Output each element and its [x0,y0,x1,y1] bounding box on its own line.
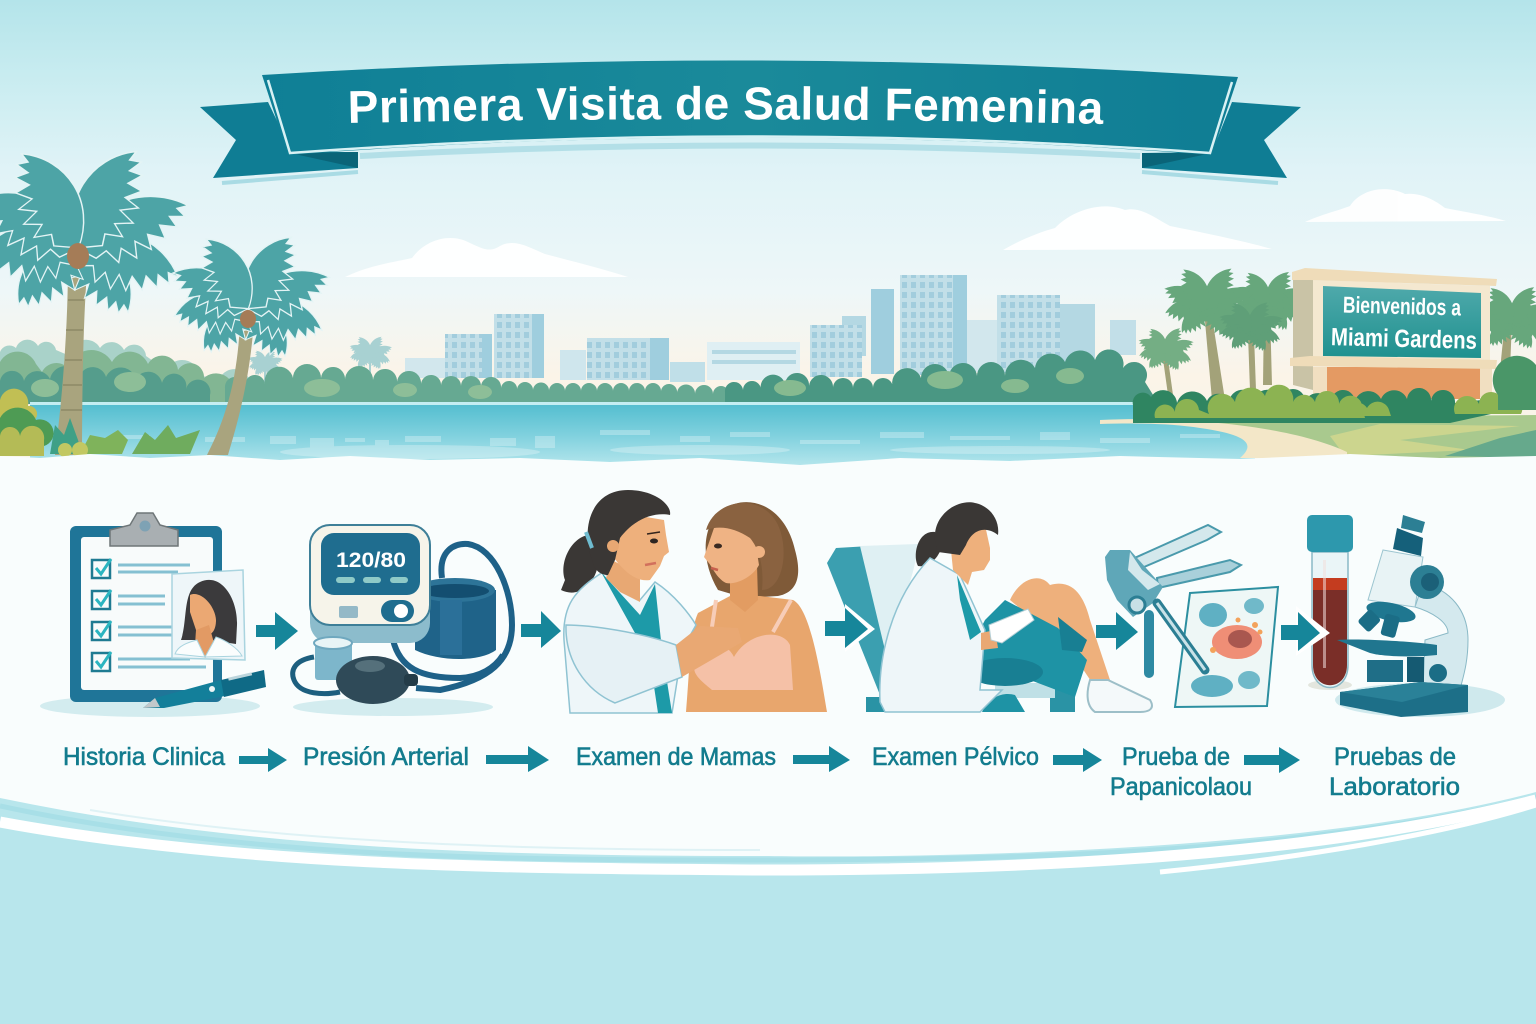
bottom swoosh [0,797,1536,872]
sign text: Miami Gardens [1331,323,1477,355]
step labels [63,743,1460,801]
arrow: step 1 to 2 [256,612,298,650]
drape [963,600,1087,697]
title: Primera Visita de Salud Femenina [350,86,1104,124]
label: pruebas de laboratorio [1329,743,1460,801]
palm: left large [0,138,198,455]
bulb [336,656,418,704]
label: pruebas de laboratorio: Pruebas de [1334,743,1456,771]
label: prueba de papanicolaou [1110,743,1252,801]
label: prueba de papanicolaou: Prueba de [1122,743,1230,771]
skyline buildings [405,275,1136,382]
step 4 illustration: pelvic exam [827,502,1152,712]
sign text: Bienvenidos a [1343,291,1461,321]
patient photo [172,570,245,660]
label: prueba de papanicolaou: Papanicolaou [1110,773,1252,801]
clip [110,513,178,546]
pen [143,670,266,708]
step 2 icon: blood pressure monitor [293,525,512,716]
bottom ocean band [0,780,1536,1024]
white content area [0,454,1536,856]
test tube [1307,515,1353,688]
foreground bushes left [0,389,200,458]
patient legs [1010,578,1111,690]
label: historia clinica: Historia Clinica [63,743,225,771]
label: presion arterial: Presión Arterial [303,743,469,771]
slide [1175,587,1278,707]
tree line [0,334,1155,404]
shoe [1088,680,1152,712]
shoreline and lawn right [1100,415,1536,458]
monitor body [310,525,430,643]
step 3 illustration: breast exam [561,490,827,713]
bushes right [1133,356,1536,458]
arrow: step 4 to 5 [1096,612,1138,650]
reading: 120/80 [336,549,406,572]
clouds [345,189,1506,277]
title banner [200,60,1301,185]
microscope [1337,515,1468,717]
small palms by the sign [1135,263,1536,402]
welcome sign [1290,268,1497,399]
step 1 icon: clipboard [40,513,266,717]
label arrows [239,746,1300,773]
doctor [561,490,742,713]
doctor [880,502,1034,712]
step 5 icon: speculum and slide [1105,525,1278,707]
label: pruebas de laboratorio: Laboratorio [1329,773,1460,801]
label: examen pelvico: Examen Pélvico [872,743,1039,771]
exam chair [827,544,1075,712]
sky background [0,0,1536,470]
gauge [314,637,352,680]
step 6 icon: test tube and microscope [1307,515,1505,717]
speculum [1105,525,1241,678]
cuff [415,578,496,659]
sign text [1331,291,1477,355]
lake [30,402,1255,468]
label: examen de mamas: Examen de Mamas [576,743,776,771]
patient [686,502,827,712]
arrow: step 5 to 6 [1281,606,1330,656]
arrow: step 3 to 4 [825,604,875,652]
palm: left small [164,227,336,455]
arrow: step 2 to 3 [521,611,561,648]
